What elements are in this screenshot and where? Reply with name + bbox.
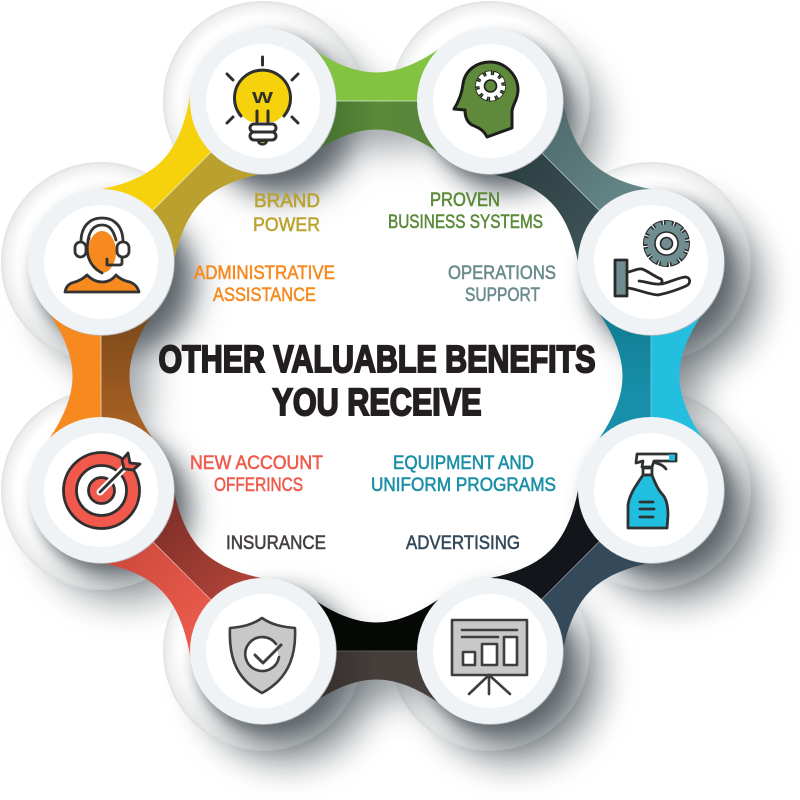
ring: advertising <box>417 578 564 725</box>
label: operations support: OPERATIONS <box>448 263 556 284</box>
icon: shield with check <box>230 618 295 693</box>
label: equipment and uniform programs <box>371 453 556 496</box>
label: advertising: ADVERTISING <box>406 533 520 554</box>
title: OTHER VALUABLE BENEFITS <box>158 339 596 381</box>
connector: operations support to equipment <box>590 300 712 452</box>
connector: brand power to proven business systems <box>300 40 452 162</box>
ring: new account offerings <box>28 417 175 564</box>
connector: advertising to insurance <box>300 590 452 712</box>
label: proven business systems: PROVEN <box>430 190 500 211</box>
central white area <box>101 101 651 651</box>
label: insurance: INSURANCE <box>226 533 326 554</box>
label: proven business systems: BUSINESS SYSTEMS <box>388 212 543 233</box>
label: brand power <box>253 191 320 236</box>
label: brand power: POWER <box>253 215 320 236</box>
wide soft shadow of rings and connectors <box>50 50 746 746</box>
label: new account offerincs: NEW ACCOUNT <box>190 453 323 474</box>
label: new account offerincs <box>190 453 323 496</box>
label: administrative assistance: ASSISTANCE <box>213 285 316 306</box>
connector: insurance to new account offerings <box>85 474 278 667</box>
icon: spray bottle <box>628 454 676 528</box>
ring: operations support <box>578 189 725 336</box>
label: administrative assistance: ADMINISTRATIVE <box>194 263 335 284</box>
label: proven business systems <box>388 190 543 233</box>
connector: new account offerings to administrative assistance <box>40 300 162 452</box>
medium shadow of rings <box>41 43 741 743</box>
icon: light bulb <box>227 57 298 144</box>
label: administrative assistance <box>194 263 335 306</box>
icon: head with gear <box>454 62 518 137</box>
connector: administrative assistance to brand power <box>85 85 278 278</box>
tight shadow of rings <box>33 34 729 730</box>
icon: headset agent <box>65 218 139 292</box>
label: equipment and uniform programs: UNIFORM PROGRAMS <box>371 475 556 496</box>
ring: insurance <box>190 578 337 725</box>
icon: light bulb: W <box>252 90 274 107</box>
icon: presentation board <box>452 620 527 694</box>
ring: equipment and uniform programs <box>578 417 725 564</box>
label: new account offerincs: OFFERINCS <box>214 475 303 496</box>
label: brand power: BRAND <box>254 191 320 212</box>
ring: brand power <box>190 28 337 175</box>
title <box>158 339 596 424</box>
ring: proven business systems <box>417 28 564 175</box>
title: YOU RECEIVE <box>272 382 482 424</box>
icon: hand holding gear <box>615 224 690 296</box>
icon: target with arrow <box>64 452 140 528</box>
label: operations support <box>448 263 556 306</box>
ring: administrative assistance <box>28 189 175 336</box>
connector: equipment to advertising <box>474 474 667 667</box>
connector: proven business systems to operations support <box>474 85 667 278</box>
label: operations support: SUPPORT <box>465 285 540 306</box>
label: equipment and uniform programs: EQUIPMENT AND <box>393 453 534 474</box>
